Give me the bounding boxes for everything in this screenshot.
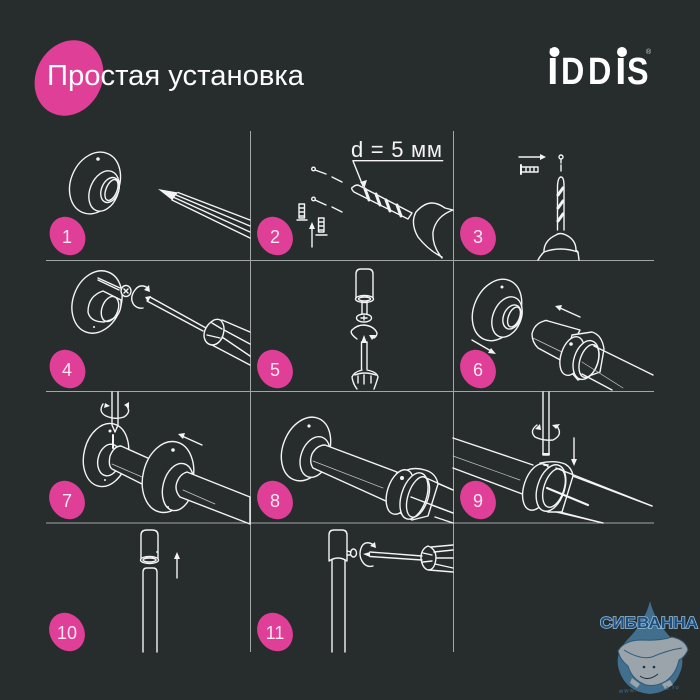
ring: [517, 460, 652, 523]
screwdriver from above: [101, 392, 129, 448]
title blob and heading: Простая установка: [47, 60, 305, 92]
step badge 4: 4: [62, 360, 72, 380]
screw marks: [312, 167, 342, 212]
escutcheon: [60, 144, 130, 222]
panel 1: mark with pencil: [60, 144, 250, 238]
step badge 1: 1: [62, 227, 72, 247]
escutcheon with screw: [64, 264, 131, 340]
rotation arrow: [360, 542, 376, 566]
panel 5: screw into cap: [351, 269, 378, 389]
drill bit: [352, 185, 412, 219]
pipe: [311, 445, 397, 502]
panel 7: two flanges on pipe: [77, 392, 250, 524]
rotation arrow: [132, 285, 150, 308]
arrow: [178, 433, 202, 445]
panel 10: cap on vertical pipe: [140, 530, 180, 652]
pencil: [158, 189, 250, 238]
step badge 4: [42, 343, 93, 395]
screwdriver: [363, 545, 453, 572]
ring: [381, 466, 453, 523]
screw: [347, 549, 356, 557]
step badge 3: 3: [473, 227, 483, 247]
panel 11: screw cap: [329, 530, 453, 652]
arrow: [174, 552, 180, 578]
step badge 3: [453, 210, 503, 262]
logo: iDDiS: D: [561, 51, 584, 93]
title blob and heading: [22, 28, 305, 128]
right flange and pipe: [135, 436, 250, 524]
panel 2: drilling: [297, 137, 453, 258]
arrows: [472, 305, 580, 354]
step badge 9: [453, 474, 503, 526]
logo: iDDiS: [547, 40, 652, 95]
bathtub character: [618, 637, 688, 689]
watermark: СИБВАННА: [600, 601, 698, 695]
step badge 1: [42, 210, 93, 262]
step badge 5: [250, 343, 300, 395]
watermark url: www.sibvanna.ru: [618, 685, 679, 695]
cap: [356, 269, 374, 322]
panel 8: assembled rail: [272, 410, 453, 523]
escutcheon: [463, 271, 531, 349]
step badge 2: 2: [270, 227, 280, 247]
cap and pipe: [329, 530, 347, 652]
logo: iDDiS: i: [615, 40, 627, 95]
step badge 7: [42, 474, 92, 526]
step badge 5: 5: [270, 360, 280, 380]
drill: [538, 177, 579, 260]
screwdriver: [352, 335, 378, 389]
dimension label: d = 5 мм: [351, 137, 442, 162]
logo: iDDiS: i: [547, 40, 559, 95]
panel 6: escutcheon and pipe: [463, 271, 653, 390]
screwdriver: [145, 296, 250, 365]
logo: iDDiS: ®: [646, 48, 652, 56]
flange: [272, 410, 340, 488]
water drop: [618, 601, 682, 694]
pipe: [143, 568, 157, 652]
panel 3: drill and plug: [519, 154, 579, 260]
dimension label: [351, 137, 443, 188]
step badge 6: [453, 343, 503, 395]
wall plugs and arrow: [297, 204, 327, 247]
rotation arrow: [351, 325, 377, 340]
screw and plug: [521, 155, 563, 174]
arrow: [571, 438, 577, 466]
step badge 11: 11: [266, 623, 284, 643]
watermark name: СИБВАННА: [600, 615, 698, 632]
cap: [140, 530, 158, 564]
step badge 8: [250, 474, 300, 526]
step badge 6: 6: [473, 360, 483, 380]
pipe: [453, 438, 652, 523]
step badge 8: 8: [270, 491, 280, 511]
hex key: [532, 392, 560, 455]
pipe with ring: [532, 320, 653, 390]
drill chuck: [413, 203, 453, 258]
panel 4: screw in escutcheon: [64, 264, 250, 365]
left flange: [77, 419, 150, 491]
step badge 9: 9: [473, 491, 483, 511]
panel 9: ring tightening: [453, 392, 652, 523]
step badge 10: 10: [57, 623, 77, 643]
step badge 7: 7: [62, 491, 72, 511]
logo: iDDiS: S: [627, 51, 648, 93]
step badge 10: [42, 606, 92, 658]
step badge 11: [250, 606, 300, 658]
logo: iDDiS: D: [588, 51, 611, 93]
step badge 2: [250, 210, 300, 262]
arrow: [519, 154, 546, 160]
